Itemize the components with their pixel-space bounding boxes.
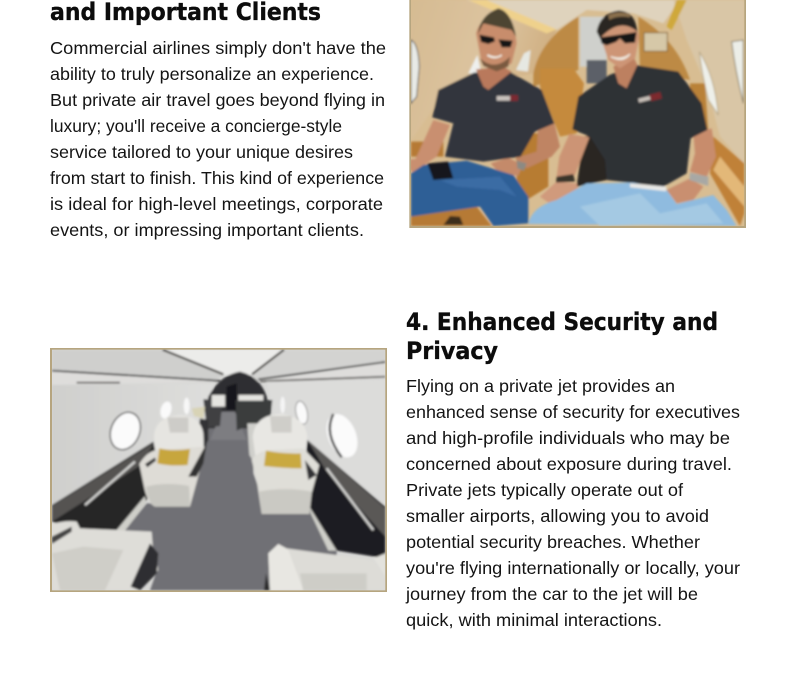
text block: personalized experience: Commercial airlines simply don't have the	[50, 38, 386, 58]
text block: personalized experience: is ideal for high-level meetings, corporate	[50, 194, 383, 214]
left man arms	[415, 120, 450, 167]
left man shirt	[432, 70, 554, 162]
text block: enhanced security	[405, 376, 740, 630]
text block: enhanced security: potential security breaches. Whether	[406, 532, 700, 552]
heading: 4. Enhanced Security and Privacy: 4. Enhanced Security and	[406, 308, 718, 336]
text block: personalized experience: luxury; you'll receive a concierge-style	[50, 116, 342, 136]
right main seat	[252, 414, 319, 514]
text block: personalized experience	[50, 38, 386, 240]
windows	[411, 40, 419, 103]
photo: two men seated in a private jet cabin	[409, 0, 746, 228]
text block: enhanced security: smaller airports, allowing you to avoid	[406, 506, 709, 526]
text block: personalized experience: service tailored to your unique desires	[50, 142, 353, 162]
text block: personalized experience: ability to truly personalize an experience.	[50, 64, 374, 84]
dark side consoles	[52, 442, 160, 530]
right man shirt	[572, 65, 707, 187]
text block: personalized experience: But private air travel goes beyond flying in	[50, 90, 385, 110]
photo: private jet cabin with cream seats	[50, 348, 387, 592]
heading: 4. Enhanced Security and Privacy	[406, 308, 718, 365]
text block: enhanced security: Flying on a private jet provides an	[406, 376, 675, 396]
side walls	[52, 383, 213, 505]
text block: enhanced security: Private jets typically operate out of	[406, 480, 683, 500]
right man arms	[557, 134, 589, 177]
text block: personalized experience: from start to finish. This kind of experience	[50, 168, 384, 188]
text block: enhanced security: concerned about exposure during travel.	[406, 454, 732, 474]
right man head	[599, 21, 639, 68]
rear bulkhead and distant aisle	[206, 370, 268, 430]
foreground seats	[52, 521, 158, 590]
left man head	[475, 22, 518, 66]
left man jeans	[411, 161, 528, 226]
rear wood bulkhead	[533, 17, 690, 87]
heading: 4. Enhanced Security and Privacy: Privacy	[406, 337, 498, 365]
carpet	[125, 428, 337, 590]
text block: enhanced security: enhanced sense of security for executives	[406, 402, 740, 422]
windows	[108, 410, 142, 452]
left main seat	[139, 415, 207, 507]
text block: enhanced security: quick, with minimal interactions.	[406, 610, 662, 630]
cabin walls and ceiling	[411, 2, 556, 114]
right man jeans	[528, 183, 737, 226]
tan seats	[540, 68, 584, 137]
text block: personalized experience: events, or impressing important clients.	[50, 220, 364, 240]
text block: enhanced security: journey from the car to the jet will be	[405, 584, 698, 604]
distant seats	[203, 399, 223, 427]
text block: enhanced security: and high-profile individuals who may be	[406, 428, 730, 448]
text block: enhanced security: you're flying internationally or locally, your	[406, 558, 740, 578]
ceiling and upper panels	[163, 350, 283, 375]
